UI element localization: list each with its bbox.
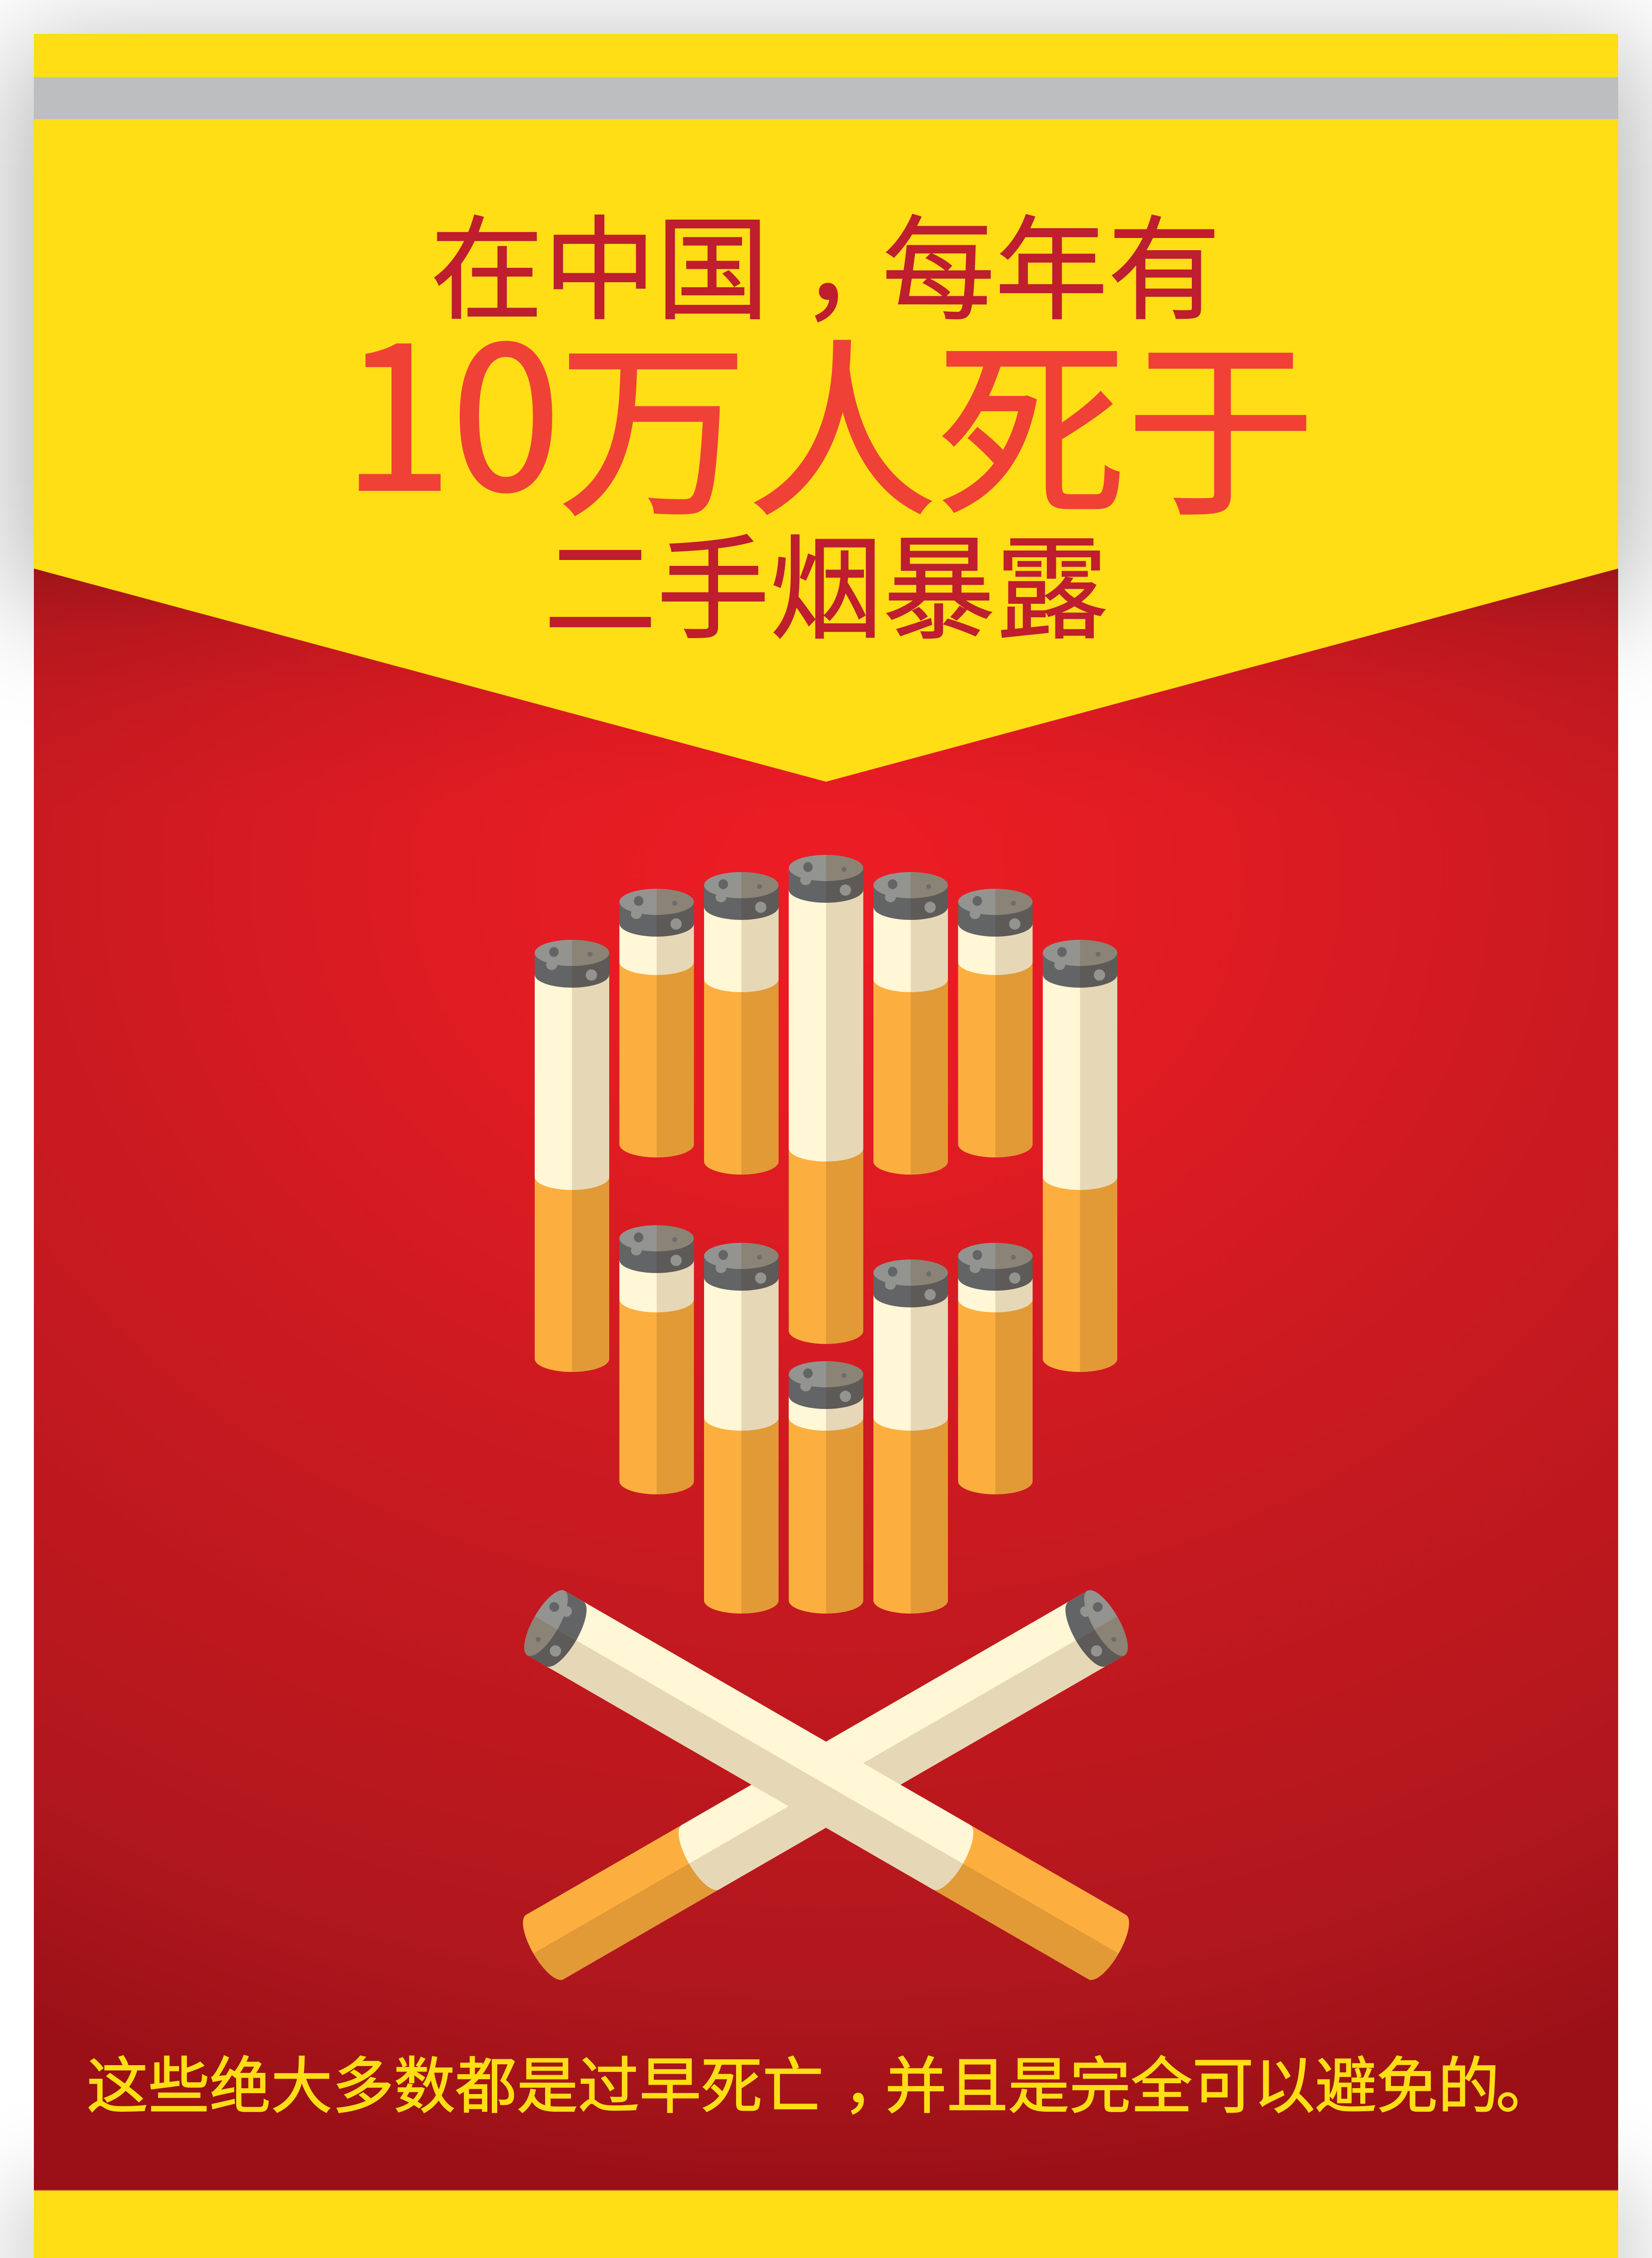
panel: yellow chevron header <box>34 34 1618 782</box>
cigarette: skull column 1 <box>535 940 609 1372</box>
cigarette: skull column 4 <box>789 855 863 1344</box>
cigarette: jaw column 5 <box>873 1260 948 1614</box>
title line 2: headline number: 万人死于 <box>558 280 1315 554</box>
text: footer statement: 这些绝大多数都是过早死亡 <box>87 2037 824 2126</box>
cigarette: jaw column 6 <box>958 1243 1032 1494</box>
icon: crossed cigarettes <box>515 1584 1137 1986</box>
cigarette: skull column 5 <box>873 872 948 1175</box>
cigarette: crossbone falling to the right <box>516 1584 1137 1986</box>
shadow: behind top panel <box>17 48 1635 605</box>
cigarette: skull column 7 <box>1043 940 1117 1372</box>
title <box>342 179 1315 662</box>
title line 1: ， <box>800 179 913 342</box>
cigarette: jaw column 2 <box>620 1225 694 1494</box>
cigarette: crossbone rising to the right <box>515 1584 1136 1986</box>
cigarette: skull column 2 <box>620 889 694 1157</box>
band: grey stripe <box>34 77 1618 119</box>
title line 1: 在中国 <box>430 179 769 342</box>
panel: red background <box>34 542 1618 2190</box>
title line 2: headline number: 1 <box>342 260 453 547</box>
title line 3: 二手烟暴露 <box>544 498 1108 662</box>
cigarette: jaw column 3 <box>704 1243 779 1614</box>
shadow: behind bottom band <box>17 2190 1635 2258</box>
title line 2: headline number: 0 <box>451 260 561 547</box>
cigarette: jaw column 4 <box>789 1361 863 1614</box>
cigarette: skull column 3 <box>704 872 779 1175</box>
text: footer statement: ， <box>843 2037 905 2126</box>
text: footer statement: 。 <box>1496 2037 1557 2126</box>
icon: skull made of cigarettes <box>535 855 1117 1614</box>
title line 1: 每年有 <box>882 179 1221 342</box>
band: bottom yellow <box>34 2190 1618 2258</box>
text: footer statement: 并且是完全可以避免的 <box>885 2037 1499 2126</box>
cigarette: skull column 6 <box>958 889 1032 1157</box>
